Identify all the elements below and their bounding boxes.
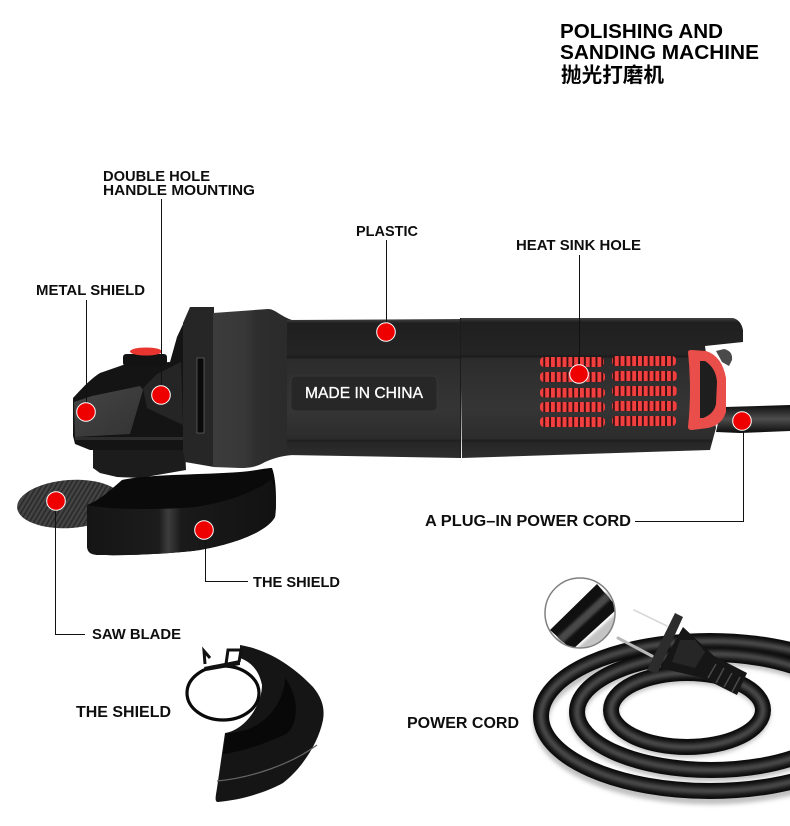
plug prongs xyxy=(618,610,667,656)
power switch button xyxy=(123,348,167,366)
title: POLISHING AND xyxy=(560,20,723,43)
made in china plate xyxy=(291,376,437,411)
guard front rim xyxy=(87,480,276,555)
callout: double hole handle mounting: HANDLE MOUNTING xyxy=(103,182,255,199)
angle grinder xyxy=(15,307,790,555)
cord shadows xyxy=(541,647,790,797)
cord loops xyxy=(541,641,790,791)
callout: saw blade: SAW BLADE xyxy=(92,626,181,643)
callout: metal shield xyxy=(36,282,145,421)
callout: the shield xyxy=(195,521,340,591)
made in china plate: MADE IN CHINA xyxy=(305,385,424,402)
metal shield gearbox xyxy=(73,322,185,450)
callout: plastic xyxy=(356,223,418,341)
callout: heat sink hole: HEAT SINK HOLE xyxy=(516,237,641,254)
callout: heat sink hole xyxy=(516,237,641,383)
rear motor body xyxy=(287,318,743,458)
callout: double hole handle mounting xyxy=(103,168,255,404)
plug body xyxy=(647,613,747,695)
detached shield guard xyxy=(187,645,324,802)
title xyxy=(560,20,759,87)
rear grey latch xyxy=(716,349,732,366)
callout: the shield: THE SHIELD xyxy=(253,574,340,591)
callout: double hole handle mounting: DOUBLE HOLE xyxy=(103,168,210,185)
lower gear neck xyxy=(93,447,186,478)
the shield guard xyxy=(87,468,276,555)
label: power cord: POWER CORD xyxy=(407,715,519,732)
neck collar xyxy=(183,307,214,467)
callout: a plug-in power cord: A PLUG–IN POWER CORD xyxy=(425,513,631,530)
power cord stub xyxy=(716,405,790,433)
title: 抛光打磨机 xyxy=(561,64,665,87)
saw blade xyxy=(15,476,125,532)
callout: a plug-in power cord xyxy=(425,412,751,530)
label: the shield part: THE SHIELD xyxy=(76,704,171,721)
red cord guard xyxy=(688,350,726,430)
magnifier inset xyxy=(544,577,616,649)
callout: metal shield: METAL SHIELD xyxy=(36,282,145,299)
heat sink vents xyxy=(540,356,677,427)
callout: saw blade xyxy=(47,492,181,643)
callout: plastic: PLASTIC xyxy=(356,223,418,240)
coiled power cord xyxy=(541,578,790,797)
title: SANDING MACHINE xyxy=(560,41,759,64)
front housing xyxy=(213,309,292,468)
